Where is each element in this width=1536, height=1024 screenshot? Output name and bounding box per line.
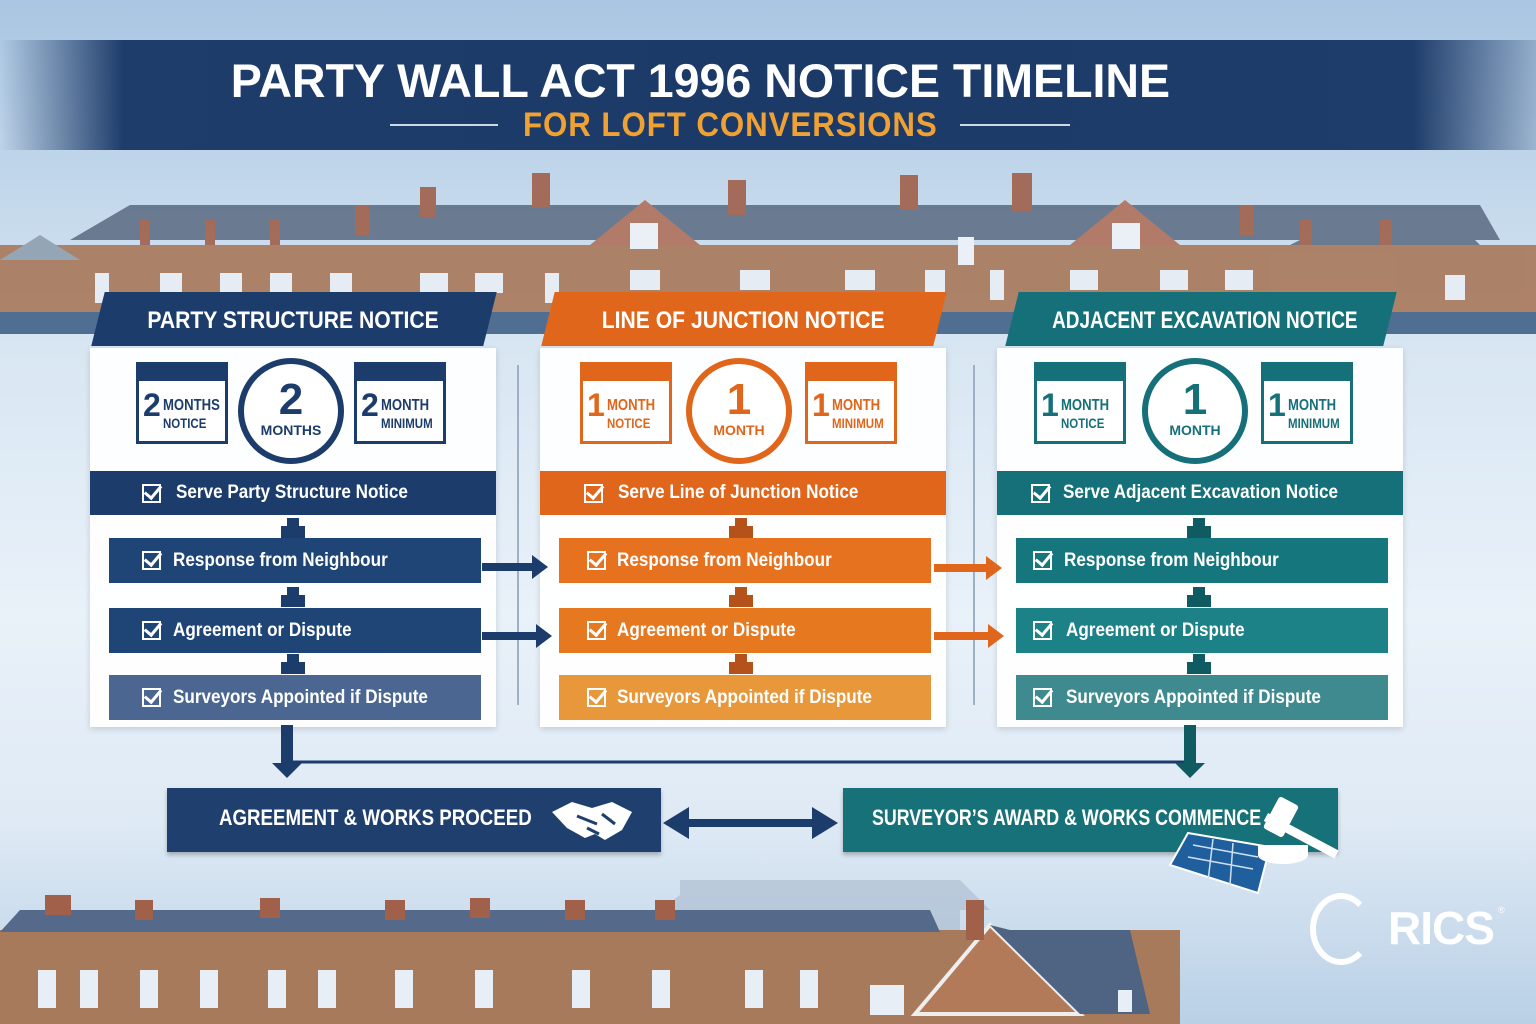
icon: calendar 1 month minimum: 1 [812, 387, 830, 423]
icon: clock 1 month [1142, 358, 1248, 464]
step: response [109, 538, 481, 583]
step: surveyors: Surveyors Appointed if Dispute [1066, 687, 1321, 708]
icon: calendar 2 month minimum: MONTH [381, 397, 429, 414]
arrow: col1 to col2 response [482, 563, 534, 571]
step: agreement [559, 608, 931, 653]
icon: calendar 1 month minimum: MONTH [1288, 397, 1336, 414]
logo: RICS [1310, 893, 1505, 965]
step: response: Response from Neighbour [617, 550, 832, 571]
step: serve [540, 471, 946, 515]
arrow: double [663, 807, 838, 839]
step: serve: Serve Line of Junction Notice [618, 482, 858, 503]
icon: clock 2 months: 2 [279, 375, 303, 424]
icon: clock 2 months [238, 358, 344, 464]
step: surveyors [1016, 675, 1388, 720]
panel: line of junction [540, 348, 946, 727]
arrow: col1 to col2 agreement [482, 632, 538, 640]
step: surveyors: Surveyors Appointed if Dispute [173, 687, 428, 708]
step: response: Response from Neighbour [1064, 550, 1279, 571]
step: agreement: Agreement or Dispute [617, 620, 796, 641]
step: response [559, 538, 931, 583]
icon: clock 1 month [686, 358, 792, 464]
step: response [1016, 538, 1388, 583]
icon: clock 1 month: 1 [727, 375, 751, 424]
icon: handshake [552, 802, 632, 840]
outcome: surveyor's award: SURVEYOR’S AWARD & WORKS COMMENCE [872, 805, 1261, 830]
icon: gavel and plan [1168, 797, 1338, 894]
step: agreement: Agreement or Dispute [173, 620, 352, 641]
logo: RICS: ® [1498, 905, 1505, 915]
icon: calendar 1 month minimum [1261, 362, 1353, 444]
background houses bottom [0, 880, 1180, 1024]
step: serve: Serve Adjacent Excavation Notice [1063, 482, 1338, 503]
header: adjacent excavation: ADJACENT EXCAVATION NOTICE [1052, 307, 1358, 334]
outcome: surveyor's award [843, 788, 1338, 852]
step: surveyors [559, 675, 931, 720]
step: agreement [1016, 608, 1388, 653]
icon: calendar 1 month notice: MONTH [607, 397, 655, 414]
step: serve [90, 471, 496, 515]
icon: calendar 1 month minimum: MINIMUM [1288, 415, 1340, 431]
icon: calendar 2 months notice: 2 [143, 387, 161, 423]
arrow: col2 to col3 agreement [934, 632, 990, 640]
header: party structure [91, 292, 497, 346]
icon: calendar 2 month minimum [354, 362, 446, 444]
icon: clock 1 month: MONTH [713, 422, 765, 438]
connector arrows to outcomes [272, 725, 1205, 778]
icon: clock 2 months: MONTHS [261, 422, 321, 438]
panel: party structure [90, 348, 496, 727]
step: serve [997, 471, 1403, 515]
header: party structure: PARTY STRUCTURE NOTICE [148, 307, 439, 334]
icon: calendar 2 months notice: MONTHS [163, 397, 220, 414]
icon: clock 1 month: MONTH [1169, 422, 1221, 438]
icon: calendar 2 months notice: NOTICE [163, 415, 206, 431]
arrow: col2 to col3 response [934, 564, 988, 572]
step: serve: Serve Party Structure Notice [176, 482, 408, 503]
icon: calendar 1 month notice [1034, 362, 1126, 444]
step: agreement: Agreement or Dispute [1066, 620, 1245, 641]
icon: calendar 1 month notice: NOTICE [607, 415, 650, 431]
icon: calendar 1 month minimum: MONTH [832, 397, 880, 414]
icon: calendar 2 months notice [136, 362, 228, 444]
step: response: Response from Neighbour [173, 550, 388, 571]
icon: calendar 1 month notice [580, 362, 672, 444]
title banner: FOR LOFT CONVERSIONS [523, 106, 937, 144]
title banner [0, 40, 1536, 150]
step: surveyors: Surveyors Appointed if Dispute [617, 687, 872, 708]
icon: calendar 1 month minimum [805, 362, 897, 444]
title banner: PARTY WALL ACT 1996 NOTICE TIMELINE [230, 54, 1170, 107]
step: surveyors [109, 675, 481, 720]
icon: calendar 1 month notice: 1 [1041, 387, 1059, 423]
icon: calendar 1 month notice: 1 [587, 387, 605, 423]
outcome: agreement & works proceed: AGREEMENT & WORKS PROCEED [219, 805, 532, 830]
header: adjacent excavation [1005, 292, 1397, 346]
outcome: agreement & works proceed [167, 788, 661, 852]
step: agreement [109, 608, 481, 653]
panel: adjacent excavation [997, 348, 1403, 727]
icon: calendar 1 month minimum: 1 [1268, 387, 1286, 423]
icon: calendar 1 month notice: MONTH [1061, 397, 1109, 414]
header: line of junction: LINE OF JUNCTION NOTICE [602, 307, 885, 334]
icon: clock 1 month: 1 [1183, 375, 1207, 424]
background houses top [0, 173, 1536, 334]
icon: calendar 1 month minimum: MINIMUM [832, 415, 884, 431]
logo: RICS: RICS [1388, 902, 1494, 954]
icon: calendar 1 month notice: NOTICE [1061, 415, 1104, 431]
icon: calendar 2 month minimum: MINIMUM [381, 415, 433, 431]
header: line of junction [541, 292, 947, 346]
icon: calendar 2 month minimum: 2 [361, 387, 379, 423]
